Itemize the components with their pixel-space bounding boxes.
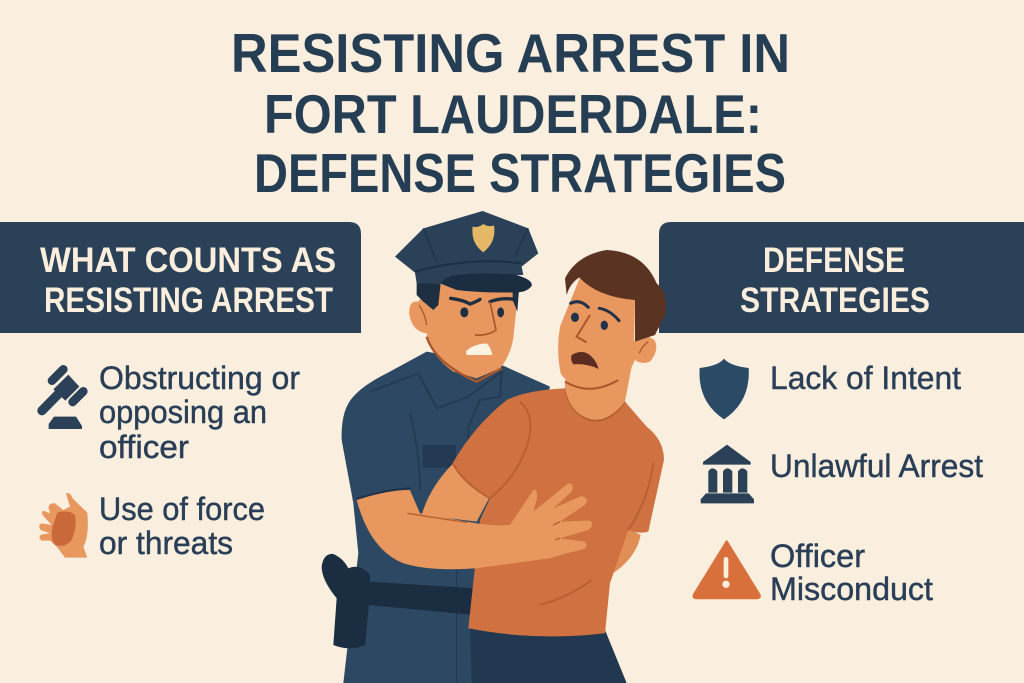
text: lack of intent: Lack of Intent	[770, 360, 961, 396]
title	[231, 22, 790, 204]
panel: defense strategies	[659, 222, 1024, 607]
officer's cap	[395, 211, 538, 293]
icon: courthouse	[701, 445, 754, 503]
icon: warning triangle	[693, 541, 760, 598]
man's shirt	[453, 388, 664, 636]
officer body	[342, 352, 550, 683]
left banner heading: WHAT COUNTS AS	[40, 241, 336, 280]
officer belt and holster	[322, 554, 473, 648]
illustration: officer restraining a man	[322, 211, 666, 683]
panel: what counts as resisting arrest	[0, 222, 361, 561]
man's head	[558, 250, 666, 391]
text: officer misconduct	[770, 538, 933, 607]
officer far arm	[422, 463, 490, 522]
officer's head	[409, 282, 519, 382]
icon: shield	[699, 359, 749, 419]
left banner heading: RESISTING ARREST	[44, 281, 333, 320]
right banner heading	[740, 241, 930, 320]
man's neck	[565, 367, 632, 419]
left banner background	[0, 222, 361, 333]
right banner background	[659, 222, 1024, 333]
text: use of force or threats: Use of force	[99, 491, 265, 527]
text: obstructing or opposing an officer: opposing an	[99, 394, 267, 430]
man's back arm	[612, 528, 641, 573]
text: obstructing or opposing an officer: Obstructing or	[99, 360, 300, 396]
right banner heading: DEFENSE	[763, 241, 905, 280]
right banner heading: STRATEGIES	[740, 281, 930, 320]
icon: hand	[39, 493, 88, 558]
text: unlawful arrest: Unlawful Arrest	[770, 448, 983, 484]
left banner heading	[40, 241, 336, 320]
text: use of force or threats	[99, 491, 265, 561]
text: officer misconduct: Officer	[770, 538, 865, 574]
text: obstructing or opposing an officer	[99, 360, 300, 465]
officer's near arm and sleeve	[357, 483, 592, 569]
title: DEFENSE STRATEGIES	[254, 142, 786, 204]
icon: gavel	[42, 369, 83, 429]
man's trousers	[470, 623, 627, 683]
title: RESISTING ARREST IN	[231, 22, 790, 84]
text: officer misconduct: Misconduct	[770, 571, 933, 607]
text: use of force or threats: or threats	[99, 525, 233, 561]
title: FORT LAUDERDALE:	[264, 83, 762, 145]
text: obstructing or opposing an officer: officer	[99, 429, 189, 465]
